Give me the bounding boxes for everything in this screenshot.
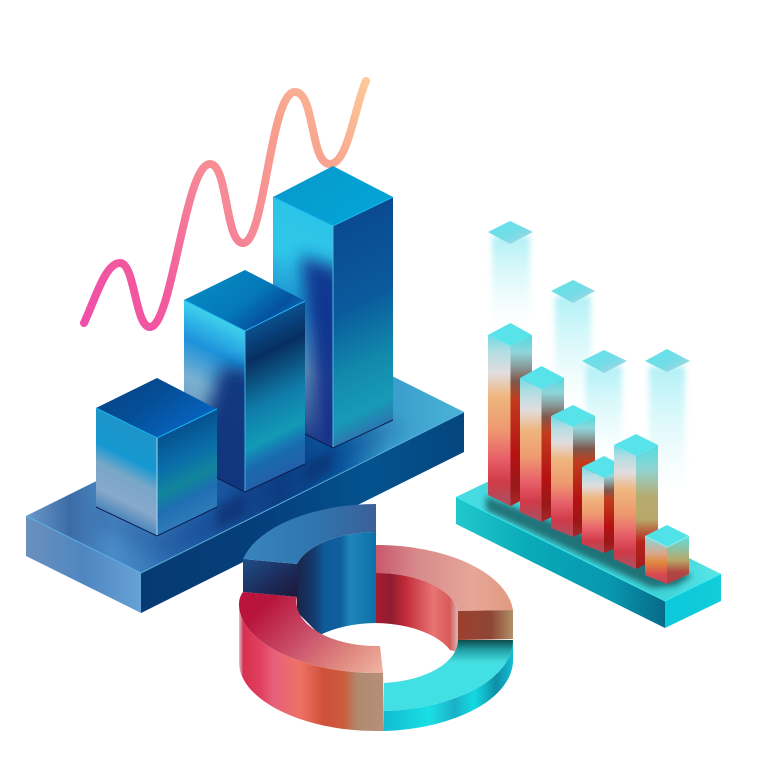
bar 1 <box>488 323 532 506</box>
cyan platform <box>456 470 721 628</box>
panel: segmented donut chart <box>239 504 513 731</box>
blue segment <box>243 504 376 635</box>
beam and cap 2 <box>551 280 595 411</box>
red segment <box>239 592 384 731</box>
beam and cap 1 <box>488 221 533 326</box>
salmon segment <box>376 545 513 652</box>
bar 2: middle <box>184 270 305 510</box>
bar 4 <box>582 456 626 553</box>
bar 2 <box>520 366 564 522</box>
bar 5 <box>614 434 658 569</box>
blue platform <box>26 355 464 613</box>
panel: blue bar chart <box>26 166 464 613</box>
beam and cap 4 <box>645 349 690 491</box>
panel: cyan bar chart <box>456 221 721 628</box>
bar 3: tallest <box>273 166 393 460</box>
beam and cap 3 <box>582 350 627 458</box>
bar 3 <box>551 405 595 537</box>
bar 6 <box>645 525 689 584</box>
teal segment <box>384 640 513 731</box>
illustration: 3D charts <box>26 77 722 731</box>
bar 1: shortest <box>96 378 217 536</box>
line chart: pink to peach wave <box>84 81 366 327</box>
